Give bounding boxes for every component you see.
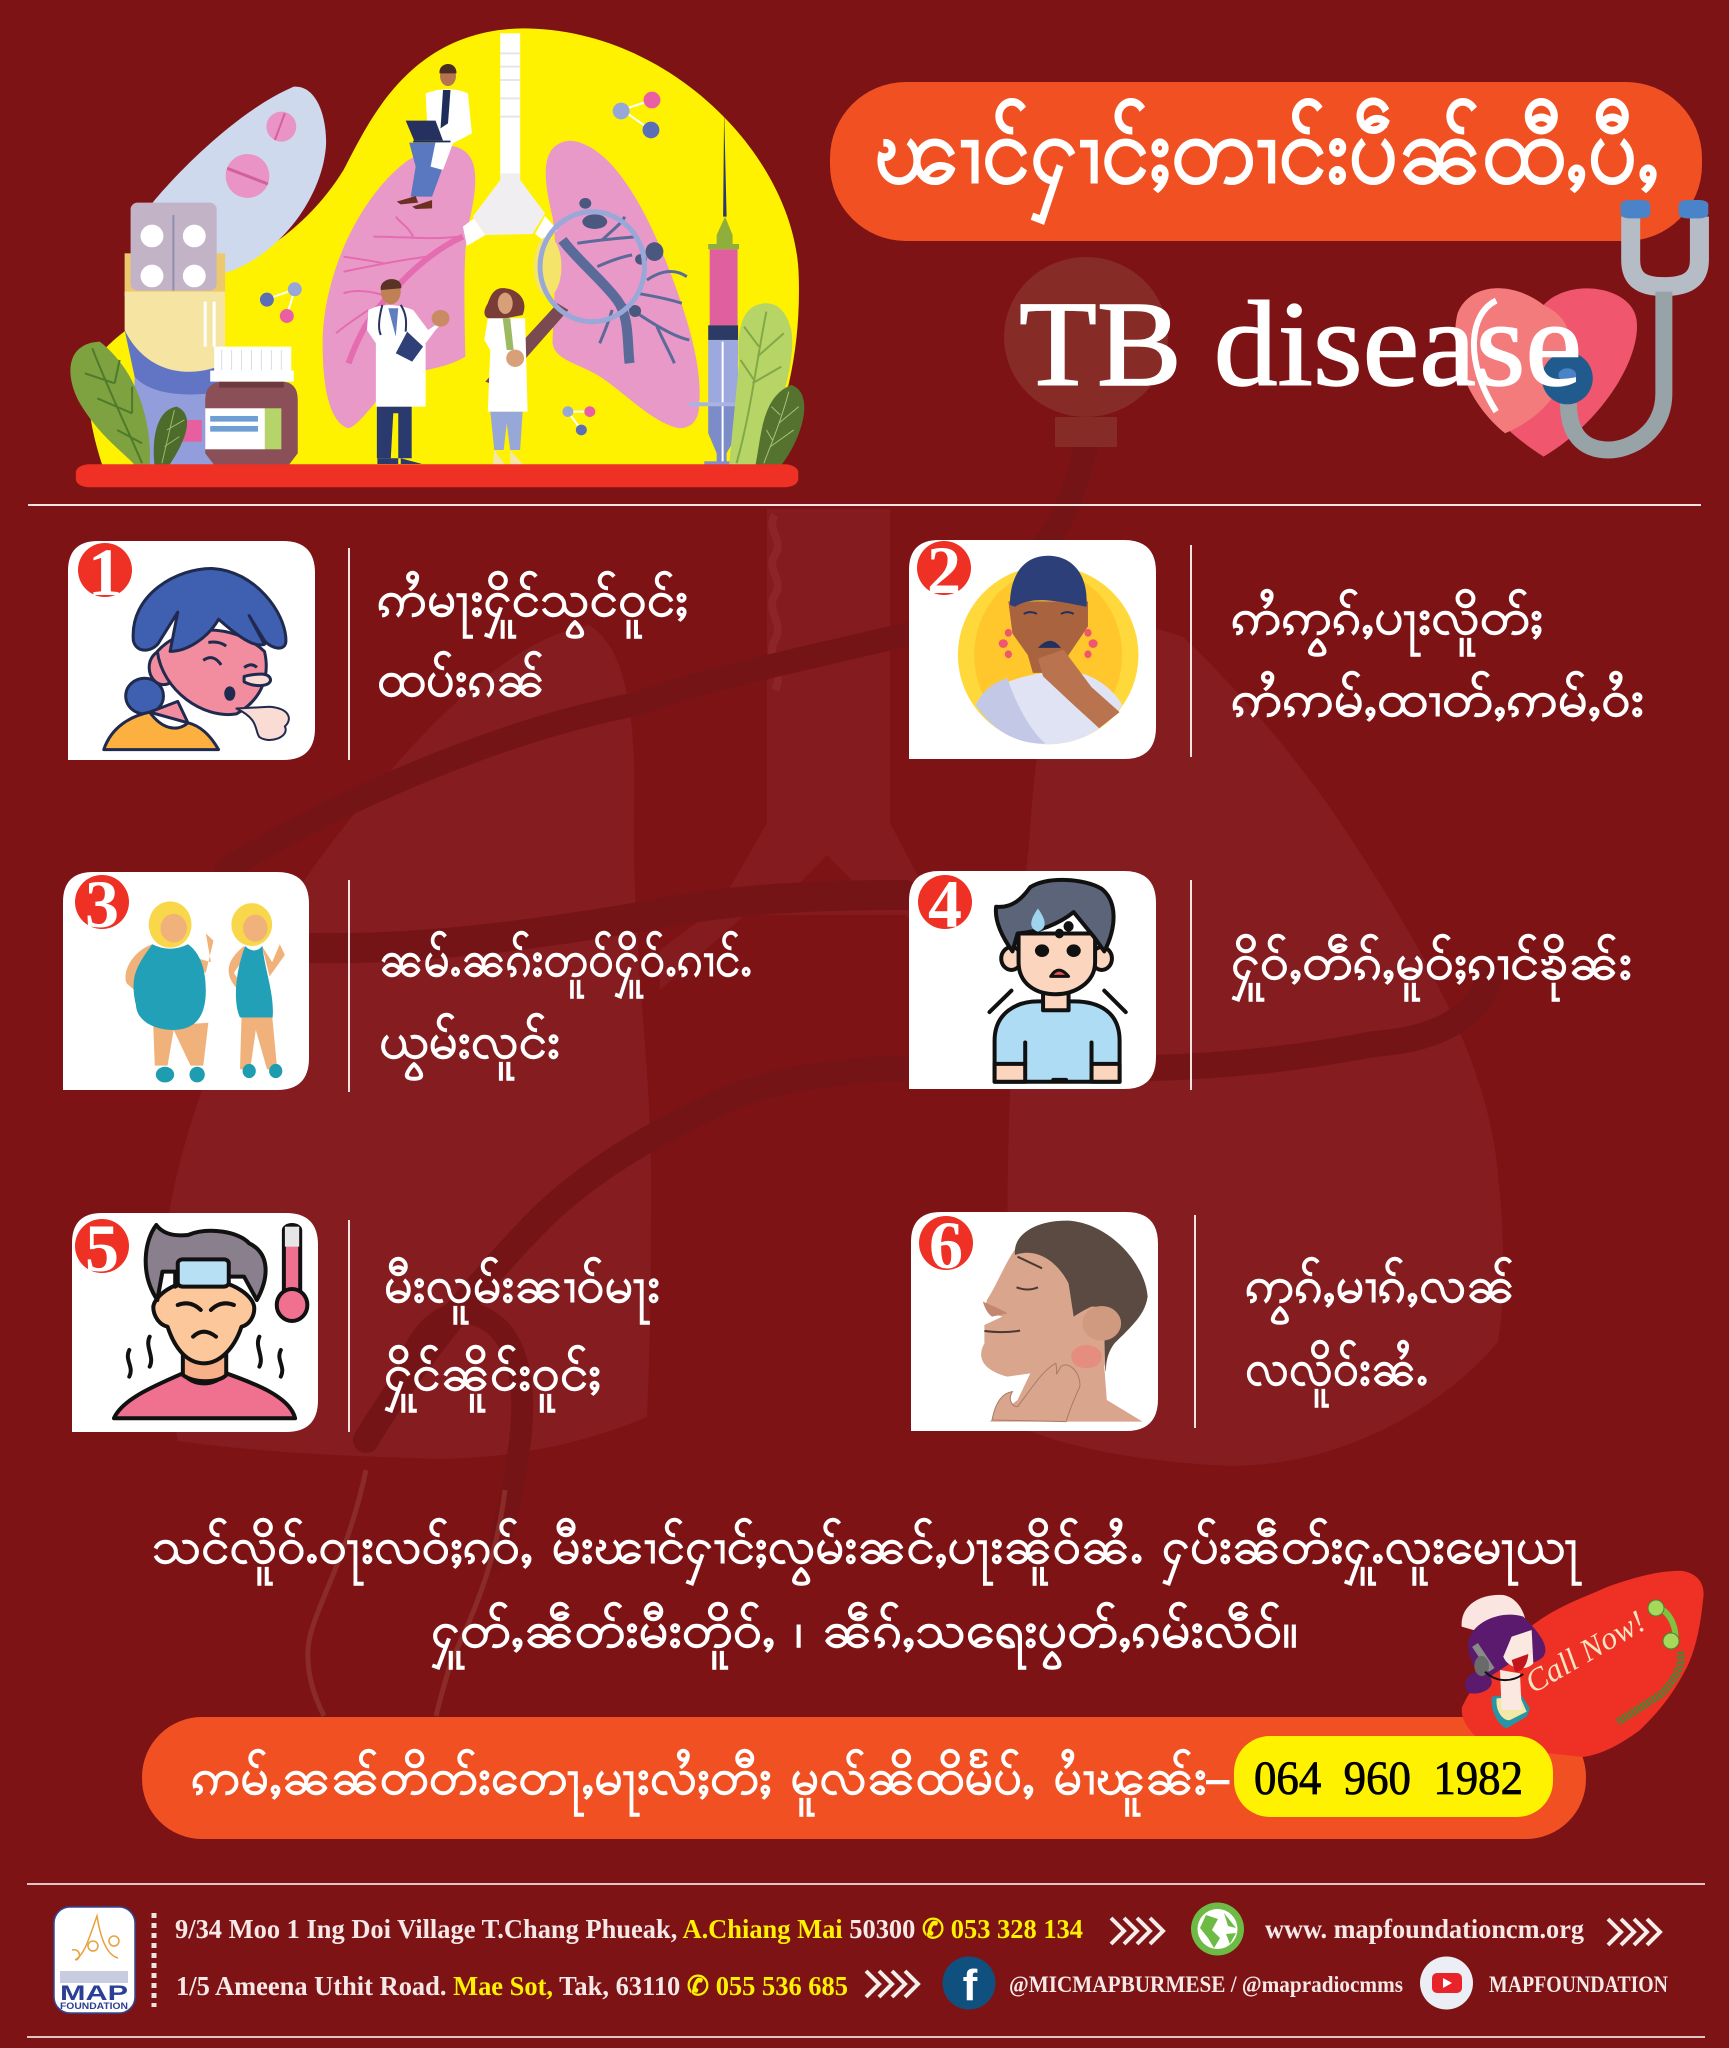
icon: green telephone handset: [1618, 1600, 1681, 1722]
advice paragraph: ႁူတ်ႇၼဵတ်းမီးတိူဝ်ႇ ၊ ၼဵၵ်ႇသရေးပွတ်ႇၵမ်းလဵဝ်။: [431, 1599, 1298, 1672]
advice paragraph: သင်လိူဝ်ႉဝႃးလဝ်ႈၵဝ်ႇ မီးၽၢင်ႁၢင်ႈလွမ်းၼင်ႇပႃးၼိူဝ်ၼႆႉ ႁပ်းၼဵတ်းႁူႉလူးမေႃယႃ: [152, 1515, 1581, 1588]
doctor woman with magnifier: [484, 288, 528, 465]
youtube handle: MAPFOUNDATION: [1489, 1972, 1668, 1997]
icon: facebook: f: [963, 1961, 978, 2010]
symptom text: [1231, 586, 1644, 741]
phone number badge: 064 960 1982: [1254, 1752, 1523, 1805]
number badge 5: [75, 1210, 129, 1286]
footer rules: [27, 1883, 1705, 2038]
divider: [1194, 1215, 1196, 1428]
syringe: [689, 110, 755, 465]
divider: [348, 1220, 350, 1432]
trachea: [463, 33, 557, 246]
number badge 2: 2: [927, 532, 961, 608]
address lines: 1/5 Ameena Uthit Road. Mae Sot, Tak, 63110 ✆ 055 536 685: [176, 1971, 848, 2001]
symptom text: မီးလူမ်းၼၢဝ်မႃး: [384, 1254, 660, 1327]
symptom text: ၼမ်ႉၼၵ်းတူဝ်ႁိူဝ်ႉၵၢင်ႉ: [379, 928, 752, 1001]
right leaves: [729, 303, 804, 465]
lavender blob with pills: [152, 87, 326, 273]
divider: [348, 548, 350, 760]
medicine jar: [205, 347, 298, 465]
magnifier over dark bronchi: [485, 198, 689, 387]
advice paragraph: [152, 1515, 1581, 1672]
title pill: ၽၢင်ႁၢင်ႈတၢင်းပဵၼ်ထီႇပီႇ: [874, 89, 1659, 228]
symptom 5: fever in the evening: [72, 1210, 660, 1432]
symptom text: ႁိူင်ၼိူင်းဝူင်ႈ: [384, 1342, 601, 1415]
number badge 6: [919, 1207, 973, 1283]
icon: man holding throat: [958, 556, 1138, 744]
logo: MAP Foundation: [54, 1907, 135, 2013]
dotted separator: [152, 1913, 156, 2007]
divider: [348, 880, 350, 1092]
number badge 1: 1: [88, 534, 122, 610]
call now badge: [1462, 1571, 1704, 1757]
symptom text: ႁိူဝ်ႇတဵၵ်ႇမူဝ်ႈၵၢင်ၶိုၼ်း: [1231, 931, 1632, 1004]
icon: woman coughing: [104, 569, 289, 750]
contact pill text: ဢမ်ႇၼၼ်တိတ်းတေႃႇမႃးလႆႈတီႈ မူလ်ၼိထိမႅပ်ႇ မၢႆၽူၼ်း–: [191, 1746, 1232, 1819]
person sitting with laptop: [397, 64, 472, 209]
medicine packet and blister: [125, 203, 225, 465]
logo: MAP Foundation: MAP: [60, 1982, 128, 2005]
symptom 1: cough over two weeks: [68, 534, 688, 760]
number badge 3: [75, 866, 129, 942]
symptom text: ဢႆဢွၵ်ႇပႃးလိူတ်ႈ: [1231, 586, 1543, 659]
number badge 6: 6: [929, 1207, 963, 1283]
phone number badge: [1234, 1736, 1553, 1817]
icon: heart and stethoscope: [1455, 200, 1708, 457]
call now text: Call Now!: [1518, 1603, 1651, 1700]
number badge 3: 3: [85, 866, 119, 942]
symptom 3: weight loss: [63, 866, 752, 1092]
background watermark: lungs and stethoscope tube: [162, 257, 1503, 1716]
address lines: 9/34 Moo 1 Ing Doi Village T.Chang Phueak, A.Chiang Mai 50300 ✆ 053 328 134: [175, 1914, 1083, 1944]
divider: [1190, 880, 1192, 1090]
icon: man touching neck: [981, 1221, 1148, 1422]
yellow blob background: [89, 28, 799, 465]
symptom 2: cough with blood: [909, 532, 1644, 759]
symptom text: ဢႆဢမ်ႇထၢတ်ႇဢမ်ႇဝႆး: [1231, 668, 1644, 741]
social handles: @MICMAPBURMESE / @mapradiocmms: [1009, 1972, 1403, 1998]
logo: MAP Foundation: FOUNDATION: [60, 2001, 128, 2011]
address lines: [175, 1914, 1083, 2001]
symptom text: လလိူဝ်းၼႆႉ: [1245, 1337, 1428, 1410]
icon: facebook: [942, 1956, 996, 2010]
contact pill: [142, 1571, 1704, 1839]
icon: sweating person: [989, 880, 1126, 1082]
left leaves: [70, 342, 187, 465]
hero illustration: doctors examining lungs: [70, 28, 804, 487]
number badge 1: [78, 534, 132, 610]
divider: [28, 504, 1701, 506]
symptom text: [377, 568, 688, 721]
number badge 4: [918, 866, 972, 942]
number badge 2: [917, 532, 971, 608]
symptom text: [379, 928, 752, 1083]
chevron arrows 1: [1111, 1918, 1163, 1944]
symptom text: [1245, 1254, 1515, 1410]
icon: globe: [1191, 1902, 1244, 1956]
website url: www. mapfoundationcm.org: [1265, 1914, 1584, 1944]
icon: youtube: [1420, 1956, 1473, 2010]
doctor with clipboard: [367, 279, 449, 464]
symptom text: [384, 1254, 660, 1415]
symptom 4: night sweats: [909, 866, 1632, 1090]
icon: operator woman with headset: [1462, 1595, 1545, 1728]
icon: person with fever and thermometer: [114, 1225, 307, 1418]
heading: TB disease: TB disease: [1019, 277, 1582, 412]
symptom text: ထပ်းၵၼ်: [377, 648, 545, 721]
symptom 6: swollen lymph nodes: [911, 1207, 1515, 1431]
chevron arrows 2: [1608, 1919, 1660, 1945]
symptom text: ဢွၵ်ႇမၢၵ်ႇလၼ်: [1245, 1254, 1515, 1327]
symptom text: ဢႆမႃးႁိူင်သွင်ဝူင်ႈ: [377, 568, 688, 641]
number badge 4: 4: [928, 866, 962, 942]
molecules: [260, 92, 660, 435]
symptom text: ယွမ်းလူင်း: [379, 1010, 560, 1083]
icon: two women, heavy and thin: [125, 901, 285, 1082]
red ground bar: [76, 464, 798, 487]
divider: [1190, 545, 1192, 757]
lungs: [323, 141, 700, 428]
number badge 5: 5: [85, 1210, 119, 1286]
chevron arrows 3: [866, 1971, 918, 1997]
